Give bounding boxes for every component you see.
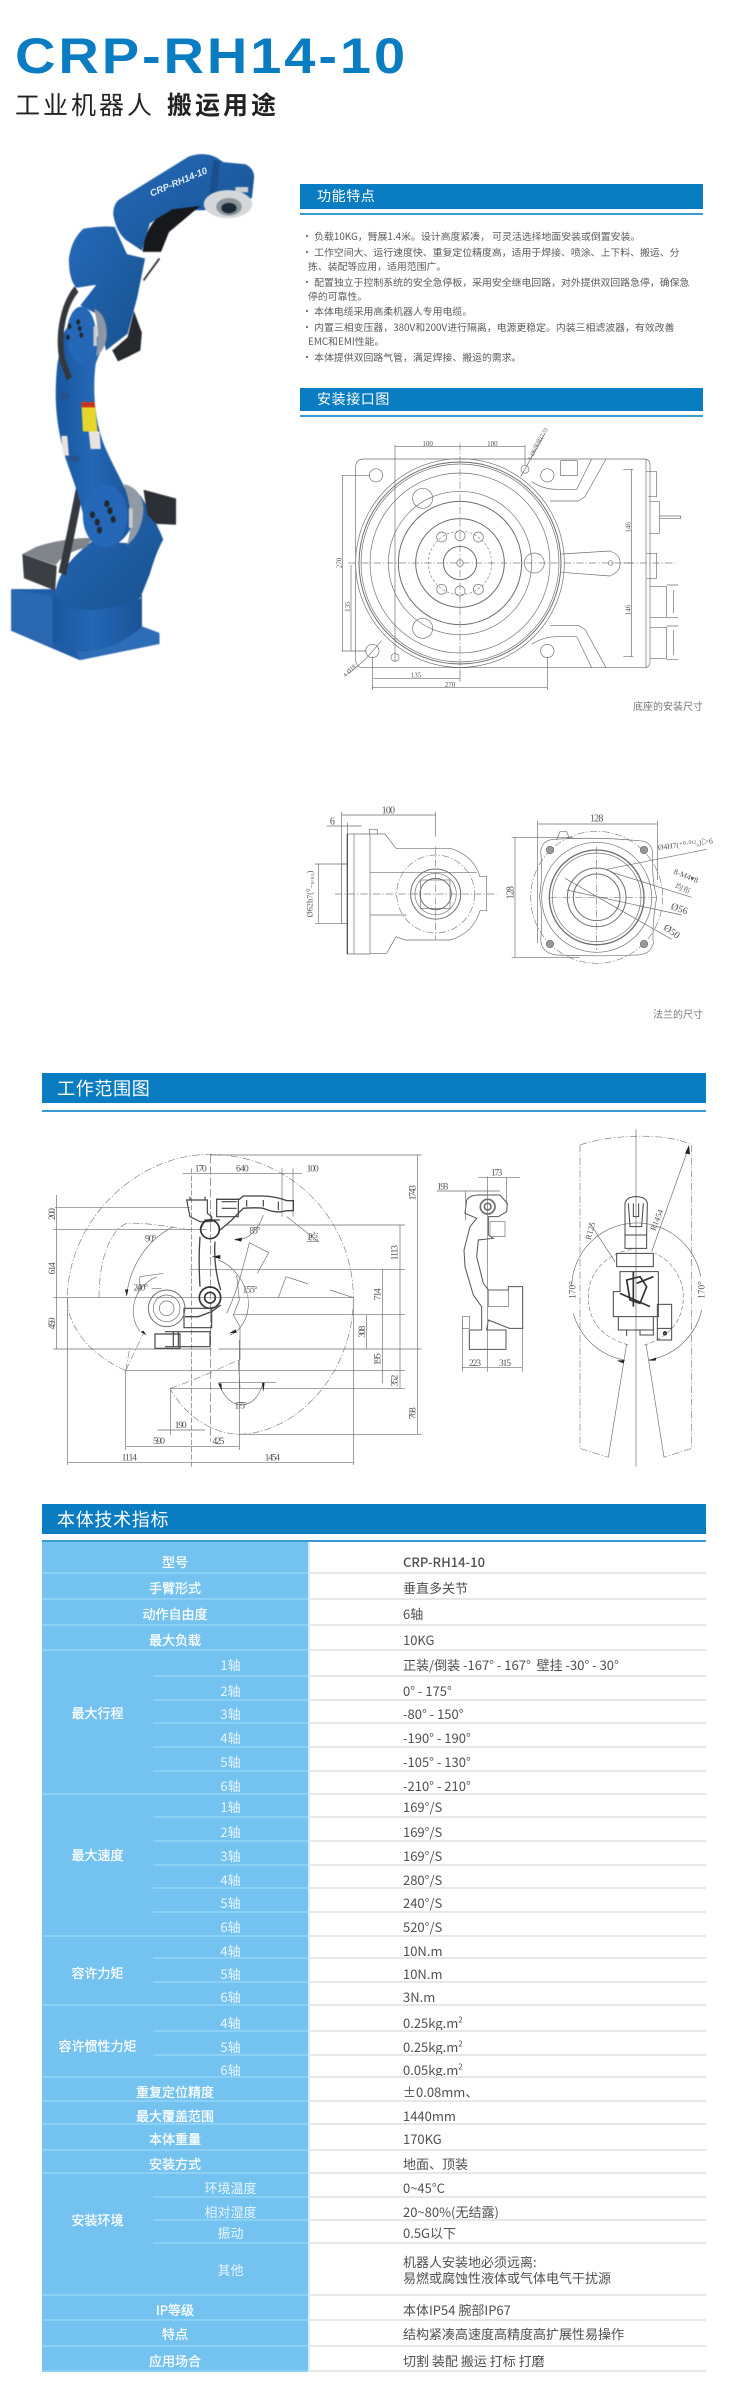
drawing: side working range: 190: [175, 1420, 187, 1431]
row: 特点: 结构紧凑高速度高精度高扩展性易操作: [403, 2324, 624, 2343]
row: inertia axis 4: 0.25kg.m2: [403, 2013, 463, 2032]
group label: 容许惯性力矩: 容许惯性力矩: [58, 2036, 136, 2055]
drawing: flange dimensions: 8-M4▾8: [672, 867, 700, 885]
drawing: side working range: 590: [153, 1436, 165, 1447]
drawing: flange dimensions: [306, 805, 714, 964]
row: speed axis 1: [42, 1795, 706, 1818]
subtitle: 工业机器人: [15, 86, 155, 122]
group label: 安装环境: 安装环境: [71, 2210, 124, 2229]
row: stroke axis 1: 正装/倒装 -167° - 167° 壁挂 -30° - 30°: [403, 1655, 619, 1674]
drawing: side working range: 459: [47, 1317, 58, 1329]
row: 型号: [42, 1542, 706, 1574]
row: stroke axis 5: [42, 1748, 706, 1772]
drawing: side working range: 425: [212, 1436, 225, 1447]
group label: 最大速度: 最大速度: [71, 1845, 124, 1864]
row: inertia axis 6: 0.05kg.m2: [403, 2060, 463, 2079]
drawing: side working range: 640: [236, 1163, 249, 1174]
drawing: side elevation and top view range: [436, 1129, 708, 1467]
row: speed axis 2: 2轴: [220, 1822, 241, 1841]
heading: 工作范围图: [42, 1073, 706, 1103]
drawing: side working range: 100: [307, 1163, 319, 1174]
row: 本体重量: 本体重量: [149, 2129, 201, 2148]
row: stroke axis 4: -190° - 190°: [403, 1728, 471, 1747]
row: inertia axis 6: 6轴: [220, 2060, 241, 2079]
drawing: flange dimensions: Ø56: [669, 901, 689, 917]
group label: 最大速度: [42, 1795, 153, 1937]
row: inertia axis 4: 4轴: [220, 2013, 241, 2032]
drawing: side working range: 90°: [145, 1234, 156, 1245]
drawing: side working range: 200: [47, 1208, 58, 1220]
row: 振动: 振动: [217, 2223, 244, 2242]
row: stroke axis 2: [42, 1677, 706, 1701]
drawing: side working range: P点: [308, 1231, 319, 1243]
row: 其他: [42, 2244, 706, 2296]
row: stroke axis 5: 5轴: [220, 1752, 241, 1771]
row: IP等级: IP等级: [156, 2300, 194, 2319]
drawing: side elevation and top view range: 193: [437, 1182, 449, 1192]
subtitle: 搬运用途: [167, 86, 279, 122]
row: 最大负载: 10KG: [403, 1630, 434, 1649]
row: speed axis 6: [42, 1913, 706, 1937]
drawing: side working range: 1114: [122, 1452, 137, 1463]
row: 本体重量: [42, 2125, 706, 2151]
drawing: side working range: [47, 1154, 422, 1467]
heading: 本体技术指标: 本体技术指标: [57, 1506, 169, 1532]
row: 动作自由度: [42, 1600, 706, 1626]
row: stroke axis 2: 0° - 175°: [403, 1681, 452, 1700]
row: 型号: 型号: [162, 1552, 188, 1571]
drawing: base mounting dimensions: 100: [487, 440, 498, 448]
drawing: side elevation and top view range: 223: [469, 1359, 481, 1369]
drawing: side elevation and top view range: 170°: [697, 1281, 708, 1299]
drawing: side working range: 195: [372, 1353, 383, 1365]
row: speed axis 6: 6轴: [220, 1917, 241, 1936]
title: CRP-RH14-10: [15, 28, 408, 84]
drawing: side elevation and top view range: 173: [491, 1169, 503, 1179]
row: 重复定位精度: 重复定位精度: [136, 2082, 214, 2101]
row: speed axis 3: 169°/S: [403, 1846, 442, 1865]
row: speed axis 4: 280°/S: [403, 1870, 442, 1889]
drawing: base mounting dimensions: 4-Ø18: [342, 664, 358, 679]
drawing: side elevation and top view range: R125: [584, 1221, 597, 1241]
drawing: flange dimensions: Ø4H7(⁺⁰·⁰¹²₀)▷6: [657, 836, 714, 852]
drawing: side working range: 175°: [234, 1400, 247, 1411]
row: speed axis 3: [42, 1842, 706, 1866]
group label: 容许力矩: 容许力矩: [71, 1963, 124, 1982]
group label: 安装环境: [42, 2174, 153, 2296]
row: speed axis 6: 520°/S: [403, 1917, 442, 1936]
row: 最大负载: [42, 1626, 706, 1651]
row: torque axis 6: 6轴: [220, 1987, 241, 2006]
row: 环境温度: 环境温度: [204, 2178, 256, 2197]
row: 最大覆盖范围: 1440mm: [403, 2106, 456, 2125]
drawing: base mounting dimensions: 100: [422, 440, 433, 448]
row: torque axis 4: [42, 1937, 706, 1959]
row: 应用场合: [42, 2347, 706, 2372]
feature list: 拣、装配等应用，适用范围广。: [308, 259, 446, 273]
row: torque axis 5: 5轴: [220, 1964, 241, 1983]
group label: 最大行程: 最大行程: [71, 1703, 124, 1722]
row: 重复定位精度: [42, 2078, 706, 2102]
row: 环境温度: 0~45°C: [403, 2178, 445, 2197]
row: 最大覆盖范围: [42, 2102, 706, 2125]
row: stroke axis 3: [42, 1701, 706, 1724]
row: 振动: 0.5G以下: [403, 2223, 456, 2242]
row: stroke axis 4: 4轴: [220, 1728, 241, 1747]
row: IP等级: [42, 2296, 706, 2321]
row: 相对湿度: [42, 2198, 706, 2221]
drawing: base mounting dimensions: [336, 426, 681, 690]
row: 相对湿度: 20~80%(无结露): [403, 2202, 499, 2221]
drawing: side working range: 614: [47, 1262, 58, 1274]
row: speed axis 5: 240°/S: [403, 1893, 442, 1912]
row: 手臂形式: 垂直多关节: [403, 1578, 468, 1597]
row: stroke axis 5: -105° - 130°: [403, 1752, 471, 1771]
drawing: flange dimensions: 100: [382, 805, 395, 816]
row: 其他: 机器人安装地必须远离:: [403, 2252, 537, 2271]
group label: 容许力矩: [42, 1937, 153, 2006]
drawing: side elevation and top view range: R1454: [649, 1207, 666, 1232]
drawing: flange dimensions: Ø50: [661, 923, 682, 941]
drawing: side working range: 155°: [242, 1285, 258, 1296]
row: inertia axis 5: 0.25kg.m2: [403, 2037, 463, 2056]
drawing: side working range: 1454: [265, 1452, 280, 1463]
feature list: EMC和EMI性能。: [308, 334, 384, 348]
row: 应用场合: 切割 装配 搬运 打标 打磨: [403, 2351, 545, 2370]
row: 应用场合: 应用场合: [149, 2351, 201, 2370]
row: stroke axis 4: [42, 1724, 706, 1748]
drawing: side working range: 170: [195, 1163, 207, 1174]
row: 手臂形式: [42, 1574, 706, 1600]
row: speed axis 4: [42, 1866, 706, 1889]
row: 安装方式: [42, 2151, 706, 2174]
drawing: side working range: 714: [372, 1288, 383, 1300]
drawing: side working range: 1743: [407, 1185, 418, 1200]
feature list: [302, 229, 689, 364]
heading: 本体技术指标: [42, 1504, 706, 1534]
group label: 容许惯性力矩: [42, 2006, 153, 2078]
row: inertia axis 5: 5轴: [220, 2037, 241, 2056]
robot arm lettering: CRP-RH14-10: [148, 166, 209, 200]
row: torque axis 5: [42, 1959, 706, 1983]
row: 型号: CRP-RH14-10: [403, 1552, 485, 1571]
drawing: base mounting dimensions: 135: [411, 672, 422, 680]
row: inertia axis 6: [42, 2056, 706, 2078]
row: 其他: 易燃或腐蚀性液体或气体电气干扰源: [403, 2268, 611, 2287]
feature list: · 本体提供双回路气管，满足焊接、搬运的需求。: [302, 350, 521, 364]
row: 手臂形式: 手臂形式: [149, 1578, 201, 1597]
drawing: base mounting dimensions: 135: [344, 601, 352, 612]
row: stroke axis 3: -80° - 150°: [403, 1704, 464, 1723]
row: speed axis 2: 169°/S: [403, 1822, 442, 1841]
row: speed axis 1: 1轴: [220, 1797, 241, 1816]
robot illustration: [10, 153, 255, 661]
row: 安装方式: 安装方式: [149, 2154, 201, 2173]
row: speed axis 1: 169°/S: [403, 1797, 442, 1816]
row: inertia axis 4: [42, 2006, 706, 2032]
row: inertia axis 5: [42, 2032, 706, 2056]
drawing: base mounting dimensions: 146: [624, 522, 632, 533]
row: torque axis 4: 10N.m: [403, 1941, 442, 1960]
feature list: 停的可靠性。: [308, 289, 367, 303]
row: speed axis 2: [42, 1818, 706, 1842]
row: 动作自由度: 6轴: [403, 1604, 423, 1623]
row: 振动: [42, 2221, 706, 2244]
feature list: · 内置三相变压器，380V和200V进行隔离，电源更稳定。内装三相滤波器，有效改善: [302, 320, 674, 334]
group label: 最大行程: [42, 1651, 153, 1795]
row: stroke axis 6: [42, 1772, 706, 1795]
row: stroke axis 1: 1轴: [220, 1655, 241, 1674]
drawing: flange dimensions: 128: [590, 814, 603, 825]
row: torque axis 5: 10N.m: [403, 1964, 442, 1983]
heading: 工作范围图: 工作范围图: [57, 1075, 150, 1101]
row: speed axis 3: 3轴: [220, 1846, 241, 1865]
row: speed axis 5: [42, 1889, 706, 1913]
drawing: side working range: 768: [407, 1407, 418, 1419]
row: speed axis 4: 4轴: [220, 1870, 241, 1889]
row: 其他: 其他: [217, 2260, 244, 2279]
drawing: base mounting dimensions: 1-Ø6深度(7.5): [526, 426, 550, 462]
row: 安装方式: 地面、顶装: [403, 2154, 468, 2173]
caption: base: 底座的安装尺寸: [633, 698, 703, 713]
row: stroke axis 3: 3轴: [220, 1704, 241, 1723]
row: torque axis 6: [42, 1983, 706, 2006]
heading: 安装接口图: 安装接口图: [317, 389, 390, 409]
subtitle: [15, 86, 279, 122]
row: 相对湿度: 相对湿度: [204, 2202, 256, 2221]
row: stroke axis 6: -210° - 210°: [403, 1776, 471, 1795]
row: stroke axis 1: [42, 1651, 706, 1677]
feature list: · 本体电缆采用高柔机器人专用电缆。: [302, 304, 472, 318]
drawing: flange dimensions: 128: [505, 886, 516, 899]
row: 特点: [42, 2321, 706, 2347]
row: speed axis 5: 5轴: [220, 1893, 241, 1912]
drawing: side working range: 1113: [390, 1245, 401, 1260]
drawing: side elevation and top view range: 170°: [568, 1281, 579, 1299]
row: 重复定位精度: ±0.08mm、: [403, 2082, 478, 2101]
row: stroke axis 2: 2轴: [220, 1681, 241, 1700]
drawing: flange dimensions: 均布: [673, 881, 692, 896]
heading: 安装接口图: [300, 388, 703, 411]
drawing: side working range: 85°: [249, 1225, 261, 1236]
row: 环境温度: [42, 2174, 706, 2198]
feature list: · 负载10KG，臂展1.4米。设计高度紧凑， 可灵活选择地面安装或倒置安装。: [302, 229, 640, 243]
drawing: side elevation and top view range: 315: [499, 1359, 511, 1369]
caption: flange: 法兰的尺寸: [653, 1006, 703, 1021]
drawing: side working range: 240°: [133, 1283, 148, 1294]
row: 动作自由度: 动作自由度: [142, 1604, 208, 1623]
row: torque axis 6: 3N.m: [403, 1987, 435, 2006]
feature list: · 配置独立于控制系统的安全急停板，采用安全继电回路，对外提供双回路急停，确保急: [302, 275, 689, 289]
row: torque axis 4: 4轴: [220, 1941, 241, 1960]
drawing: flange dimensions: 6: [330, 817, 335, 828]
drawing: side working range: 308: [357, 1325, 368, 1338]
row: 特点: 特点: [162, 2324, 188, 2343]
row: 最大覆盖范围: 最大覆盖范围: [136, 2106, 214, 2125]
row: stroke axis 6: 6轴: [220, 1776, 241, 1795]
row: 最大负载: 最大负载: [149, 1630, 201, 1649]
feature list: · 工作空间大、运行速度快、重复定位精度高，适用于焊接、喷涂、上下料、搬运、分: [302, 245, 679, 259]
row: 本体重量: 170KG: [403, 2129, 442, 2148]
drawing: base mounting dimensions: 146: [624, 604, 632, 615]
drawing: base mounting dimensions: 270: [445, 681, 456, 689]
heading: 功能特点: 功能特点: [317, 186, 375, 206]
heading: 功能特点: [300, 184, 703, 209]
drawing: base mounting dimensions: 270: [336, 557, 344, 568]
row: IP等级: 本体IP54 腕部IP67: [403, 2300, 511, 2319]
drawing: flange dimensions: Ø62h7(⁰₋₀.₀₃): [306, 870, 315, 917]
drawing: side working range: 352: [390, 1374, 401, 1387]
